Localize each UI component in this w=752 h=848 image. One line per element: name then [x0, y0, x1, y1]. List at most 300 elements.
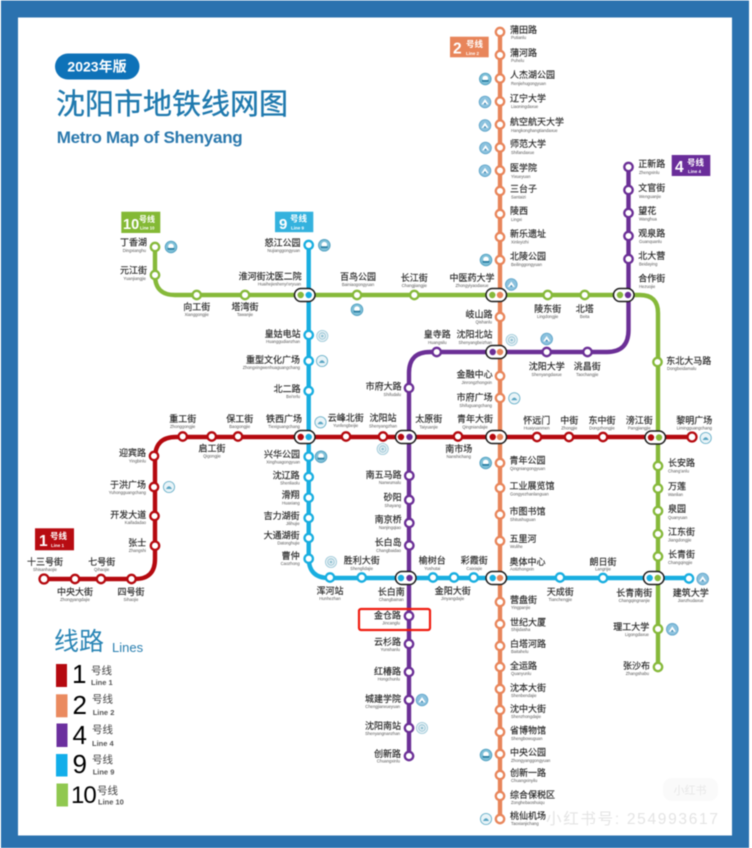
- line 2 and 4 left labels: 创新路: [374, 748, 401, 759]
- line 2 station labels: 人杰湖公园: [510, 69, 555, 80]
- line 2 station labels: Lingxi: [511, 217, 522, 222]
- line 2 station labels: Puhelu: [511, 58, 525, 63]
- legend: line 2: Line 2: [93, 708, 114, 717]
- line 1, 9 and 10 left labels: 吉力湖街: [264, 510, 300, 521]
- line 2 station labels: Taoxianjichang: [511, 821, 539, 826]
- interchange: Qingniandajie: [486, 430, 506, 444]
- labels centred along horizontal lines: Changqingnanjie: [619, 598, 651, 603]
- labels centred along horizontal lines: 中央大街: [57, 586, 93, 597]
- line 2 and 4 left labels: 砂阳: [384, 492, 402, 502]
- interchange: Changbainan: [396, 572, 416, 584]
- labels centred along horizontal lines: Dongzhongjie: [589, 426, 615, 430]
- labels centred along horizontal lines: Limingguangchang: [677, 426, 713, 430]
- labels centred along horizontal lines: Shenglidajie: [350, 566, 374, 571]
- line 1 route: [44, 437, 692, 579]
- line 2 and 4 left labels: Yunshanlu: [380, 647, 401, 652]
- line 2 station labels: 桃仙机场: [510, 810, 546, 821]
- line 2 and 4 left labels: 金融中心: [457, 369, 493, 380]
- line 10 right labels: 长安路: [668, 457, 695, 468]
- legend: line 10: 10: [71, 782, 96, 809]
- line 2 and 4 left labels: [365, 308, 493, 764]
- labels centred along horizontal lines: 长白南: [378, 586, 405, 597]
- line tag: 10: 号线: [139, 214, 155, 224]
- line tag: 1: 1: [39, 533, 48, 550]
- line 2 station labels: 新乐遗址: [510, 228, 546, 239]
- line 2 station labels: 创新一路: [510, 767, 546, 778]
- labels centred along horizontal lines: 十三号街: [27, 556, 63, 567]
- line 2 station labels: Xinleyizhi: [511, 240, 529, 244]
- line 1, 9 and 10 left labels: Kaifadadao: [125, 520, 147, 525]
- line 2 station labels: 省博物馆: [510, 724, 546, 736]
- line 1, 9 and 10 left labels: 兴华公园: [264, 448, 300, 460]
- labels centred along horizontal lines: Zhongjie: [561, 426, 578, 430]
- line 1, 9 and 10 left labels: 元江街: [120, 264, 147, 276]
- labels centred along horizontal lines: 太原街: [415, 413, 442, 424]
- line 1, 9 and 10 left labels: 丁香湖: [120, 238, 147, 248]
- line 2 station labels: Santaizi: [511, 194, 526, 200]
- line 10 right labels: 东北大马路: [666, 355, 711, 366]
- labels centred along horizontal lines: Qihaojie: [94, 567, 110, 572]
- legend heading: Lines: [112, 640, 144, 655]
- line 1, 9 and 10 left labels: 沈辽路: [273, 470, 300, 480]
- line 1, 9 and 10 left labels: Nujianggongyuan: [267, 248, 301, 253]
- line 4 right labels: 观泉路: [638, 228, 665, 238]
- labels centred along horizontal lines: 东中街: [588, 414, 616, 426]
- interchange: Tiexiguangchang: [294, 430, 315, 444]
- interchange: Pangjiangjie: [645, 431, 666, 444]
- line 2 station labels: Wulihe: [510, 544, 523, 549]
- line 2 and 4 left labels: 南五马路: [366, 469, 402, 480]
- labels centred along horizontal lines: 洮昌街: [574, 360, 601, 372]
- line 2 station labels: 三台子: [510, 183, 537, 194]
- legend: line 9: 号线: [92, 753, 113, 766]
- line 2 and 4 left labels: Qishanlu: [475, 320, 493, 324]
- line 1 stations: [40, 432, 696, 584]
- line 2 and 4 left labels: 金仓路: [374, 610, 401, 620]
- line tag: 2: 号线: [466, 39, 484, 49]
- line 2 and 4 left labels: 沈阳南站: [365, 720, 401, 731]
- line 10 right labels: 万莲: [668, 480, 686, 492]
- labels centred along horizontal lines: 沈阳大学: [529, 360, 565, 372]
- line tag: 9: 9: [279, 216, 287, 233]
- line 2 station labels: Zonghebaoshuiqu: [511, 800, 545, 805]
- labels centred along horizontal lines: 黎明广场: [676, 414, 712, 426]
- year badge: 2023年版: [67, 58, 127, 74]
- line 1, 9 and 10 left labels: 大通湖街: [264, 530, 300, 540]
- labels centred along horizontal lines: Shenyangzhan: [369, 424, 398, 428]
- labels centred along horizontal lines: Qigongjie: [203, 454, 222, 458]
- labels centred along horizontal lines: Huangsilu: [428, 340, 447, 345]
- interchange: Hezuojie: [614, 288, 634, 302]
- line 2 and 4 left labels: Shenyangbeizhan: [458, 340, 493, 345]
- labels centred along horizontal lines: 长江街: [401, 272, 428, 283]
- line 4 right labels: 正新路: [638, 158, 665, 169]
- line 2 station labels: Zhongyanggongyuan: [511, 758, 551, 763]
- line 2 station labels: 沈本大街: [510, 682, 546, 693]
- labels centred along horizontal lines: [27, 271, 713, 603]
- labels centred along horizontal lines: 向工街: [183, 301, 210, 312]
- labels centred along horizontal lines: 中医药大学: [449, 272, 495, 283]
- line 2 station labels: Chuangxinyilu: [511, 778, 538, 783]
- line 2 station labels: Renjiehugongyuan: [511, 81, 547, 86]
- labels centred along horizontal lines: Xianggongjie: [185, 312, 209, 317]
- line 10 right labels: 长青街: [668, 548, 695, 560]
- labels centred along horizontal lines: 榆树台: [419, 554, 446, 566]
- line 1, 9 and 10 left labels: 于洪广场: [110, 479, 146, 490]
- line 1, 9 and 10 left labels: 皇姑电站: [265, 328, 301, 339]
- title: 沈阳市地铁线网图: [56, 88, 288, 121]
- watermark: 小红书号: 254993617: [546, 810, 718, 828]
- year badge: [55, 54, 140, 80]
- line 2 and 4 left labels: Jinrongzhongxin: [462, 380, 493, 385]
- line tag: 9: [275, 212, 313, 233]
- line 10 stations: [151, 243, 662, 671]
- line 10 right labels: [666, 355, 711, 565]
- labels centred along horizontal lines: Jianzhudaxue: [678, 598, 704, 603]
- line 9 stations: [304, 241, 693, 583]
- line 2 and 4 left labels: Shifudalu: [384, 392, 402, 397]
- labels centred along horizontal lines: 七号街: [88, 556, 115, 567]
- labels centred along horizontal lines: Zhongyiyaodaxue: [455, 283, 489, 288]
- labels centred along horizontal lines: 朗日街: [589, 556, 617, 567]
- line 2 station labels: Shifandaxue: [511, 150, 535, 155]
- line 1, 9 and 10 left labels: 滑翔: [282, 489, 300, 500]
- line 4 right labels: Wenguanjie: [639, 194, 662, 199]
- line 10 right labels: 泉园: [668, 503, 686, 514]
- attraction icons: [163, 73, 711, 825]
- line 1, 9 and 10 left labels: Jilihujie: [286, 521, 300, 526]
- watermark: 小红书: [674, 784, 706, 797]
- line 2 station labels: Aotizhongxin: [510, 566, 535, 572]
- line 2 station labels: Qingniangongyuan: [510, 466, 546, 471]
- labels centred along horizontal lines: Pangjiangjie: [628, 426, 651, 430]
- line 1, 9 and 10 left labels: Yuanjiangjie: [123, 276, 147, 281]
- line tag: 10: Line 10: [140, 226, 155, 230]
- labels centred along horizontal lines: Yushutai: [424, 566, 440, 571]
- line 2 station labels: 市图书馆: [510, 506, 546, 516]
- labels centred along horizontal lines: 长青南街: [616, 587, 652, 598]
- line 2 and 4 left labels: Jincanglu: [382, 620, 401, 626]
- line 2 station labels: 白塔河路: [510, 638, 546, 649]
- labels centred along horizontal lines: Yunfengbeijie: [333, 423, 359, 428]
- line tag: 9: Line 9: [291, 226, 305, 230]
- line 2 and 4 left labels: Shenyangnanzhan: [365, 731, 401, 736]
- labels centred along horizontal lines: 铁西广场: [266, 413, 302, 424]
- line 2 station labels: Shitushuguan: [510, 517, 536, 522]
- legend: line 4: 4: [72, 720, 87, 750]
- line 4 right labels: 望花: [638, 205, 656, 216]
- labels centred along horizontal lines: 胜利大街: [344, 554, 380, 566]
- labels centred along horizontal lines: Shenyangdaxue: [532, 372, 562, 377]
- line 4 right labels: Beidaying: [639, 262, 658, 266]
- legend: line 2: 2: [72, 690, 87, 720]
- line 2 station labels: 奥体中心: [510, 556, 546, 567]
- line 10 right labels: Chang'anlu: [668, 468, 690, 474]
- line tag: 2: Line 2: [466, 51, 480, 56]
- line 1, 9 and 10 left labels: 北二路: [274, 383, 301, 394]
- line 1, 9 and 10 left labels: Zhangshabu: [626, 671, 650, 676]
- labels centred along horizontal lines: 重工街: [169, 413, 196, 424]
- line tag: 1: Line 1: [51, 543, 65, 548]
- line 1, 9 and 10 left labels: Zhongxingwenhuaguangchang: [243, 365, 301, 370]
- line 2 station labels: [510, 24, 564, 826]
- line 2 station labels: 蒲田路: [510, 24, 537, 35]
- legend: line 10: 号线: [97, 784, 118, 797]
- line 1, 9 and 10 left labels: Huanggudianzhan: [266, 339, 301, 344]
- labels centred along horizontal lines: Lingdongjie: [537, 314, 559, 319]
- labels centred along horizontal lines: Langrijie: [595, 566, 612, 572]
- labels centred along horizontal lines: 保工街: [226, 413, 253, 424]
- line 1, 9 and 10 left labels: 迎宾路: [119, 447, 146, 458]
- line 2 station labels: 营盘街: [510, 594, 537, 605]
- labels centred along horizontal lines: 金阳大街: [435, 585, 471, 596]
- line 2 station labels: 五里河: [510, 533, 537, 544]
- labels centred along horizontal lines: Caixiajie: [466, 566, 483, 571]
- labels centred along horizontal lines: Changbainan: [379, 597, 404, 602]
- line 2 and 4 left labels: 岐山路: [465, 308, 492, 320]
- watermark: [546, 778, 718, 828]
- line 1, 9 and 10 left labels: Xinghuagongyuan: [266, 460, 301, 464]
- labels centred along horizontal lines: 北塔: [576, 303, 594, 314]
- line 1, 9 and 10 left labels: Bei'erlu: [286, 394, 301, 399]
- line tag: 4: [672, 155, 710, 176]
- legend: line 4: 号线: [92, 723, 113, 736]
- legend: line 2: 号线: [92, 692, 113, 706]
- line 1, 9 and 10 left labels: 重型文化广场: [246, 354, 300, 365]
- line 2 station labels: 工业展览馆: [510, 480, 555, 491]
- labels centred along horizontal lines: 怀远门: [523, 414, 550, 426]
- labels centred along horizontal lines: Huaiyuanmen: [524, 426, 550, 430]
- line 2 and 4 left labels: 市府广场: [457, 392, 493, 402]
- line tag: 10: [121, 212, 160, 233]
- labels centred along horizontal lines: 皇寺路: [424, 329, 451, 340]
- labels centred along horizontal lines: Taiyuanjie: [419, 424, 439, 430]
- line 1, 9 and 10 left labels: Caozhong: [281, 561, 300, 566]
- labels centred along horizontal lines: Tianchengjie: [549, 597, 573, 602]
- interchange: Changqingnanjie: [644, 572, 664, 584]
- line 2 station labels: 师范大学: [510, 138, 546, 149]
- line 2 station labels: 航空航天大学: [510, 116, 564, 127]
- labels centred along horizontal lines: Nanshichang: [446, 454, 472, 459]
- line tag: 1: [35, 528, 74, 550]
- line 2 station labels: Hangkonghangtiandaxue: [511, 128, 558, 133]
- line 2 and 4 left labels: 市府大路: [366, 380, 402, 392]
- line 2 station labels: Yixueyuan: [511, 174, 531, 179]
- line 2 and 4 left labels: Nanwumalu: [379, 480, 402, 485]
- line 1, 9 and 10 left labels: 理工大学: [613, 621, 649, 632]
- line 10 route: [155, 247, 658, 667]
- labels centred along horizontal lines: 建筑大学: [673, 587, 709, 598]
- line 4 route: [409, 167, 628, 756]
- line 2 station labels: 沈中大街: [510, 703, 546, 714]
- line 2 and 4 left labels: 南京桥: [375, 514, 402, 524]
- labels centred along horizontal lines: Tawanjie: [237, 312, 254, 317]
- labels centred along horizontal lines: 沈阳站: [369, 412, 397, 423]
- labels centred along horizontal lines: 启工街: [198, 442, 226, 454]
- line tag: 2: [450, 37, 489, 58]
- line 4 right labels: Zhengxinlu: [639, 170, 660, 175]
- labels centred along horizontal lines: 中街: [560, 414, 578, 426]
- interchange: Aotizhongxin: [486, 572, 506, 584]
- line 1, 9 and 10 left labels: Yingbinlu: [129, 458, 147, 464]
- line 2 and 4 left labels: Shayang: [384, 503, 402, 508]
- line tag: 10: 10: [123, 217, 139, 233]
- legend: line 10: Line 10: [98, 798, 124, 806]
- legend: line 4: Line 4: [92, 739, 115, 748]
- line 2 station labels: 综合保税区: [510, 789, 555, 800]
- labels centred along horizontal lines: Changjiangjie: [402, 283, 428, 288]
- line 2 station labels: Shenzhongdajie: [511, 714, 542, 719]
- line 1, 9 and 10 left labels: 曹仲: [282, 550, 300, 561]
- labels centred along horizontal lines: Taochangjie: [576, 372, 599, 377]
- line 1, 9 and 10 left labels: Huaihejieshenyi'eryuan: [258, 282, 302, 286]
- legend: line 9: [56, 749, 114, 779]
- line 2 stations: [496, 28, 504, 823]
- line 2 station labels: 北陵公园: [510, 252, 546, 262]
- line 1, 9 and 10 left labels: Dingxianghu: [123, 248, 147, 253]
- legend: line 9: 9: [72, 749, 87, 779]
- line 4 stations: [405, 163, 633, 760]
- legend: line 1: 1: [72, 659, 86, 689]
- line tag: 9: 号线: [290, 214, 308, 224]
- line 10 right labels: Jiangdongjie: [668, 538, 692, 542]
- labels centred along horizontal lines: 百鸟公园: [340, 271, 376, 282]
- labels centred along horizontal lines: Qingniandajie: [462, 424, 488, 430]
- labels centred along horizontal lines: Shisanhaojie: [33, 567, 58, 572]
- labels centred along horizontal lines: Bainiaogongyuan: [342, 282, 375, 287]
- line 1, 9 and 10 left labels: 怒江公园: [265, 237, 301, 248]
- interchange: Zhongyiyaodaxue: [486, 288, 506, 302]
- line tag: 1: 号线: [50, 531, 68, 541]
- labels centred along horizontal lines: 云峰北街: [328, 412, 364, 423]
- line 2 station labels: Shenbendajie: [511, 693, 537, 698]
- line 2 and 4 left labels: Changbaidao: [376, 548, 402, 553]
- line 1, 9 and 10 left labels: Shenliaolu: [280, 480, 300, 486]
- legend heading: [54, 628, 144, 656]
- line 2 and 4 left labels: 城建学院: [365, 693, 401, 704]
- labels centred along horizontal lines: Beita: [580, 314, 590, 319]
- line 2 station labels: Yingpanjie: [511, 605, 531, 610]
- line 2 station labels: Liaoningdaxue: [511, 104, 539, 109]
- interchange: Shenyangbeizhan: [486, 346, 506, 358]
- line 1, 9 and 10 left labels: 淮河街沈医二院: [239, 270, 302, 282]
- labels centred along horizontal lines: 青年大街: [457, 413, 493, 424]
- legend: line 1: Line 1: [91, 678, 113, 687]
- line 1, 9 and 10 left labels: Zhangshi: [129, 548, 146, 553]
- legend: line 2: [56, 690, 114, 720]
- line 1, 9 and 10 left labels: 张沙布: [623, 660, 650, 671]
- labels centred along horizontal lines: Baogongjie: [229, 424, 251, 429]
- labels centred along horizontal lines: 四号街: [117, 586, 145, 597]
- line 2 and 4 left labels: Chuangxinlu: [377, 758, 401, 764]
- line 10 right labels: Quanyuan: [668, 515, 688, 520]
- line tag: 4: 号线: [687, 158, 705, 168]
- line 4 right labels: Wanghua: [639, 216, 657, 222]
- labels centred along horizontal lines: Hunhezhan: [319, 596, 341, 601]
- line 2 station labels: 世纪大厦: [510, 616, 546, 628]
- legend: line 9: Line 9: [93, 768, 114, 776]
- legend: line 1: 号线: [91, 664, 112, 677]
- line 2 station labels: 陵西: [510, 206, 528, 216]
- line tag: 4: Line 4: [688, 169, 702, 174]
- line 1, 9 and 10 left labels: Huaxiang: [282, 500, 300, 506]
- line 2 station labels: 青年公园: [510, 454, 546, 466]
- line 1, 9 and 10 left labels: 张士: [128, 537, 146, 548]
- highlight box: Jincanglu: [359, 609, 430, 630]
- line 2 and 4 left labels: Shifuguangchang: [459, 403, 493, 408]
- labels centred along horizontal lines: 浑河站: [316, 585, 344, 596]
- line 2 and 4 left labels: 长白岛: [375, 536, 402, 548]
- labels centred along horizontal lines: Sihaojie: [124, 597, 139, 602]
- line 10 right labels: Wanlian: [668, 492, 684, 497]
- line 4 right labels: 合作街: [638, 272, 665, 284]
- labels centred along horizontal lines: 陵东街: [534, 303, 561, 314]
- line 2 and 4 left labels: Hongchunlu: [378, 676, 401, 682]
- labels centred along horizontal lines: 塔湾街: [231, 301, 259, 312]
- line 10 right labels: 江东街: [668, 526, 695, 537]
- line 1, 9 and 10 left labels: [109, 237, 650, 676]
- labels centred along horizontal lines: Tiexiguangchang: [268, 424, 301, 429]
- line 2 and 4 left labels: 沈阳北站: [456, 329, 492, 340]
- line 2 station labels: Shengbowuguan: [511, 736, 543, 741]
- labels centred along horizontal lines: Zhongyangdajie: [60, 597, 91, 602]
- line 4 right labels: Hezuojie: [639, 284, 656, 289]
- line 10 right labels: Dongbeidamalu: [667, 366, 697, 371]
- labels centred along horizontal lines: 滂江街: [626, 414, 653, 426]
- labels centred along horizontal lines: 南市场: [445, 443, 472, 454]
- legend heading: 线路: [54, 628, 104, 656]
- labels centred along horizontal lines: Jinyangdajie: [441, 596, 465, 601]
- line 2 station labels: 蒲河路: [510, 47, 537, 58]
- line 4 right labels: [638, 158, 665, 289]
- legend: line 4: [56, 720, 115, 750]
- line 2 and 4 left labels: Chengjianxueyuan: [365, 704, 401, 709]
- line 2 station labels: Beilinggongyuan: [511, 262, 543, 267]
- line 2 station labels: Gongyezhanlanguan: [510, 492, 549, 496]
- legend: line 10: [56, 782, 124, 809]
- line 9 route: [309, 245, 689, 578]
- line 2 station labels: 中央公园: [510, 746, 546, 758]
- line 10 right labels: Changqingjie: [668, 560, 693, 565]
- line 2 and 4 left labels: 云杉路: [374, 636, 401, 647]
- line 2 and 4 left labels: 红椿路: [374, 666, 401, 676]
- line 4 right labels: 文官街: [638, 182, 665, 193]
- line 1, 9 and 10 left labels: 开发大道: [110, 509, 146, 520]
- line 2 station labels: 全运路: [510, 660, 537, 671]
- line 2 route: [498, 32, 502, 819]
- subtitle: Metro Map of Shenyang: [57, 128, 243, 147]
- line 1, 9 and 10 left labels: Yuhongguangchang: [109, 490, 147, 495]
- line 2 station labels: Putianlu: [511, 35, 527, 40]
- line 4 right labels: Guanquanlu: [639, 239, 662, 244]
- interchange: Huaihejie: [294, 288, 315, 302]
- line 2 station labels: Quanyunlu: [511, 671, 532, 676]
- line 4 right labels: 北大营: [638, 250, 665, 261]
- line 2 station labels: Shijidasha: [511, 627, 531, 632]
- legend: line 1: [56, 659, 113, 689]
- labels centred along horizontal lines: Zhonggongjie: [170, 424, 196, 429]
- labels centred along horizontal lines: 彩霞街: [461, 554, 488, 566]
- line 1, 9 and 10 left labels: Ligongdaxue: [625, 632, 650, 637]
- line 1, 9 and 10 left labels: Datonghujie: [277, 540, 300, 546]
- line 2 station labels: Baitahelu: [511, 649, 529, 654]
- line tag: 4: 4: [675, 159, 684, 176]
- line tag: 2: 2: [453, 40, 462, 58]
- interchange: Taiyuanjie: [396, 430, 416, 444]
- line 2 and 4 left labels: Nanjingqiao: [379, 525, 402, 530]
- labels centred along horizontal lines: 天成街: [547, 586, 574, 597]
- line 2 station labels: 医学院: [510, 162, 537, 173]
